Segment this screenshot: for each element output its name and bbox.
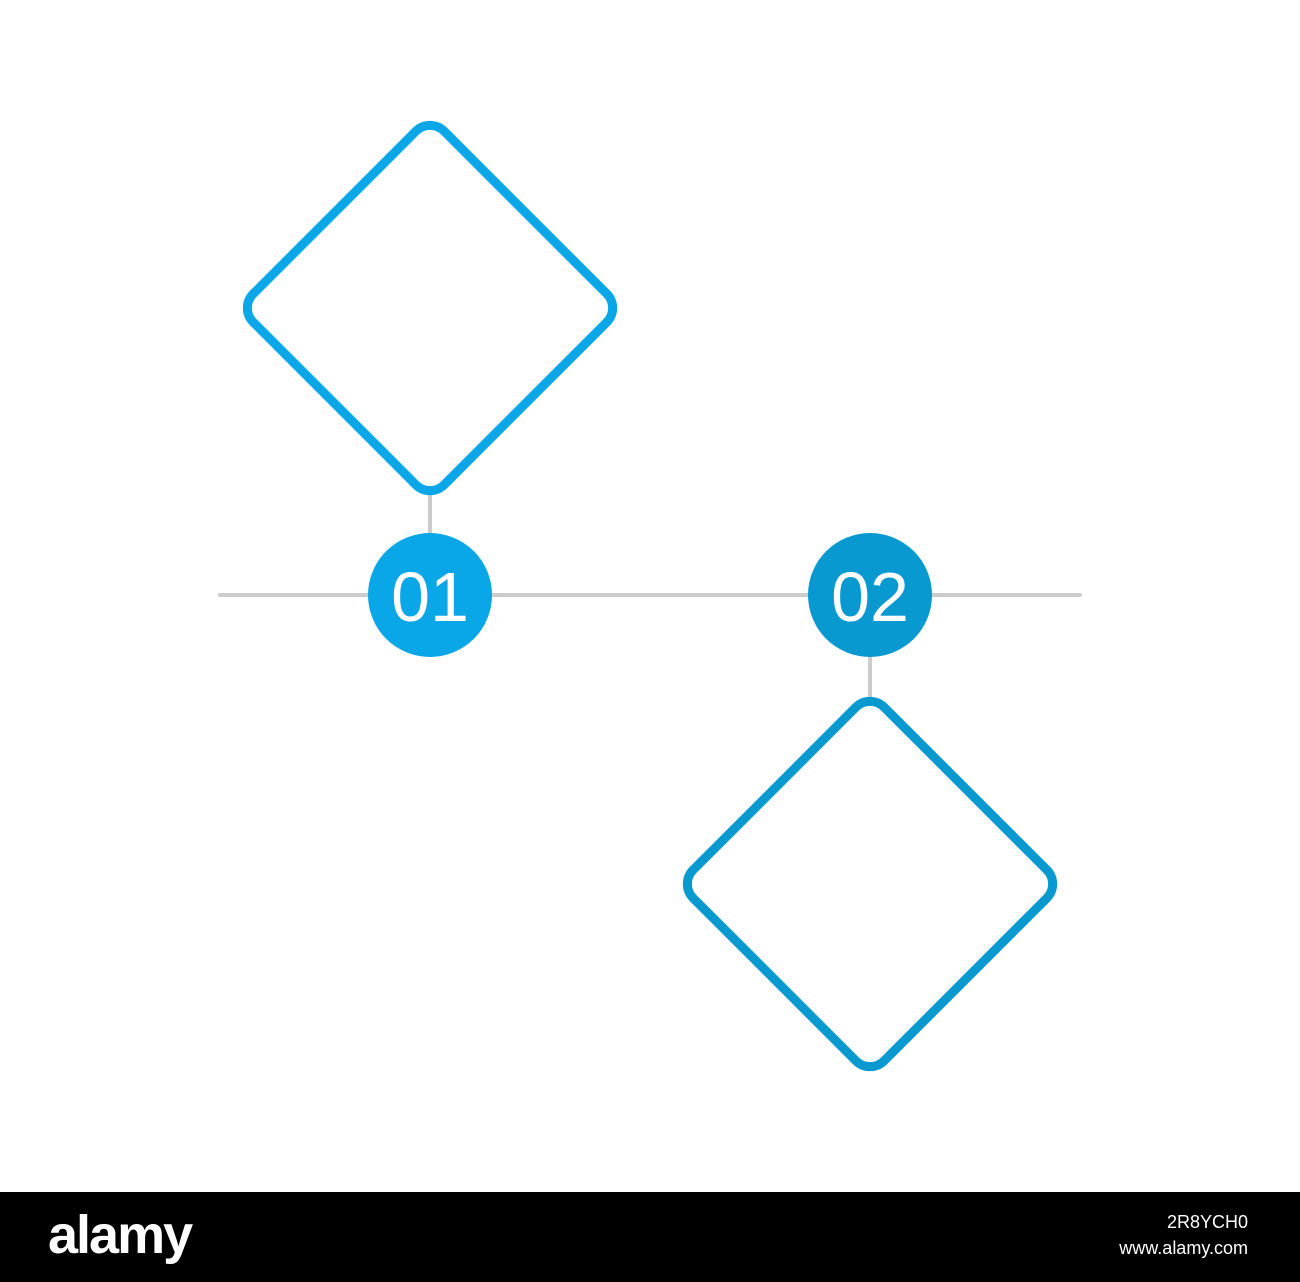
footer bar xyxy=(0,1192,1300,1282)
marker 02: 02 xyxy=(831,558,909,636)
diamond box 1 xyxy=(239,117,621,499)
diamond box 2 xyxy=(679,693,1061,1075)
footer image id: 2R8YCH0 xyxy=(1167,1212,1248,1232)
connector 2 xyxy=(868,650,872,702)
marker 01 xyxy=(368,533,492,657)
marker 02 xyxy=(808,533,932,657)
footer url: www.alamy.com xyxy=(1119,1238,1248,1258)
marker 01: 01 xyxy=(391,558,469,636)
connector 1 xyxy=(428,490,432,540)
footer logo: alamy xyxy=(48,1205,191,1265)
timeline line xyxy=(220,593,1080,597)
